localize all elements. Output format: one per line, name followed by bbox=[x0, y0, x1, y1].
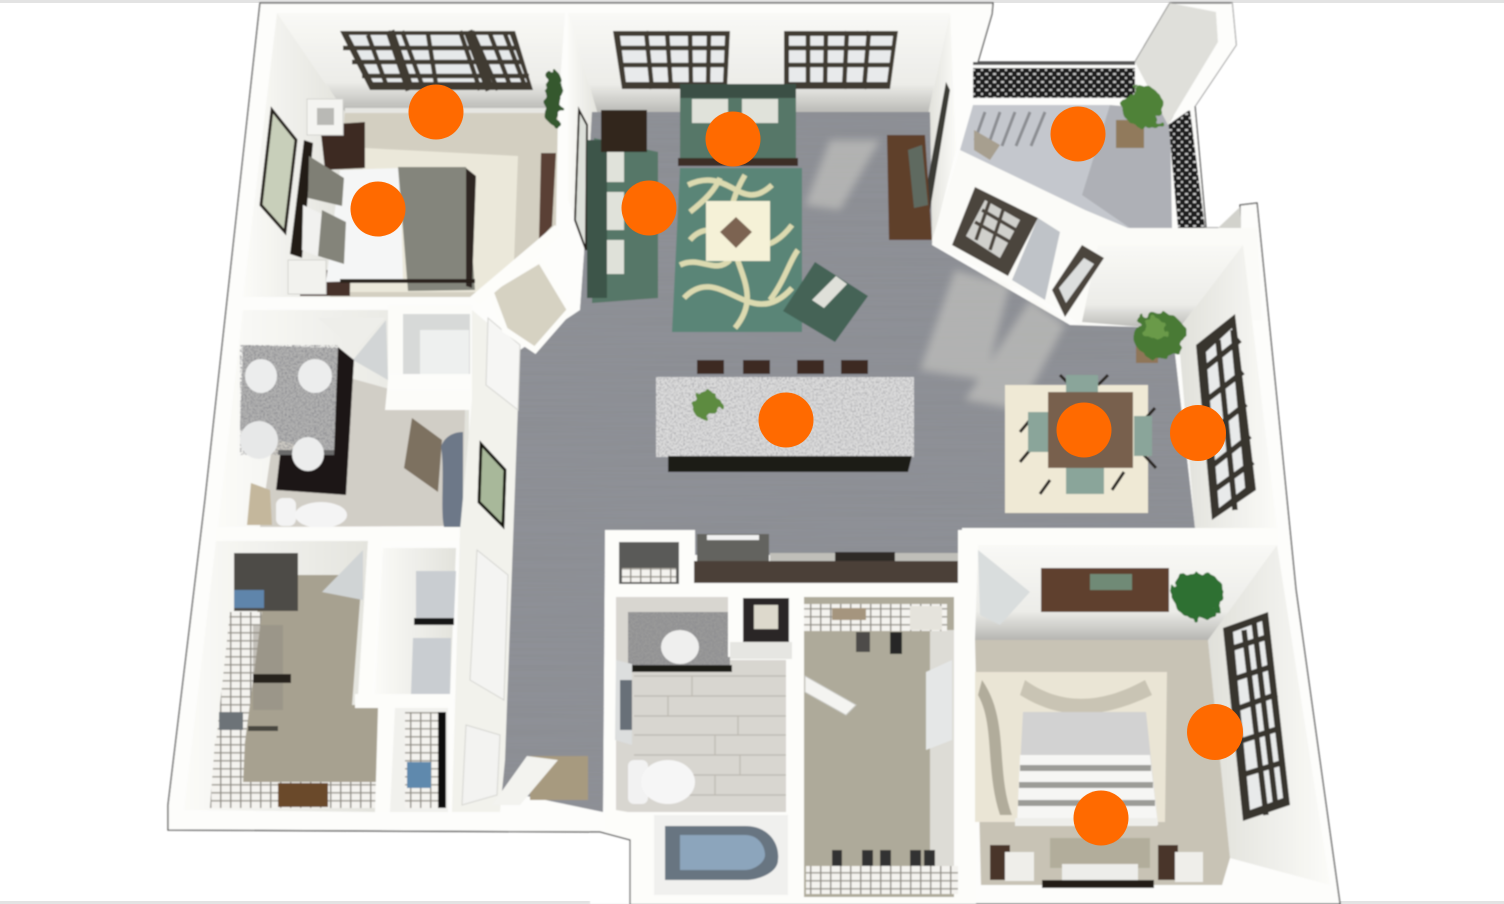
plant bbox=[1172, 571, 1224, 619]
marker: dining window bbox=[1170, 405, 1226, 461]
white cutout corner bbox=[590, 832, 630, 904]
kitchen island bbox=[656, 360, 914, 472]
stools bbox=[697, 360, 868, 374]
railing side bbox=[1168, 110, 1205, 228]
entry mat bbox=[530, 756, 588, 800]
shelving bbox=[210, 553, 377, 808]
door bbox=[353, 320, 388, 380]
nightstands bbox=[990, 845, 1203, 882]
linen shelf bbox=[728, 597, 792, 659]
sofa top bbox=[678, 84, 798, 166]
door 3 bbox=[462, 725, 500, 805]
console bbox=[1041, 568, 1169, 612]
marker: dining table bbox=[1056, 402, 1112, 458]
bed bbox=[290, 140, 476, 291]
bed bbox=[1015, 712, 1158, 888]
room: living area wood floor bbox=[490, 13, 1210, 815]
side table bbox=[601, 110, 647, 152]
side door bbox=[926, 660, 952, 750]
wall stubs bbox=[216, 527, 466, 812]
corridor art bbox=[479, 444, 505, 526]
room: lower right bedroom bbox=[975, 545, 1330, 888]
entry door bbox=[492, 756, 558, 805]
plant bbox=[545, 70, 563, 126]
dresser bbox=[539, 153, 556, 240]
toilet bbox=[628, 760, 695, 804]
plant bbox=[691, 391, 721, 419]
sofa left bbox=[587, 138, 658, 303]
toilet bbox=[276, 498, 347, 528]
chair legs bbox=[1020, 375, 1156, 494]
room: hall bath bbox=[590, 597, 792, 904]
bedroom door frame bbox=[490, 260, 570, 350]
pantry bbox=[619, 542, 679, 584]
core: kitchen counter and walls bbox=[605, 530, 978, 904]
coffee table bbox=[706, 201, 770, 261]
rug bbox=[672, 168, 802, 332]
dining side wall edge bbox=[962, 528, 1278, 545]
balcony bbox=[960, 3, 1241, 228]
small notch wall bbox=[1218, 207, 1241, 228]
outer wall shell bbox=[168, 3, 1340, 904]
closet nook walls bbox=[385, 305, 472, 410]
marker: lower bedroom window bbox=[1187, 704, 1243, 760]
double vanity bbox=[240, 345, 354, 495]
marker: kitchen island bbox=[758, 392, 814, 448]
room: master bath upper left bbox=[218, 305, 472, 528]
cutout edge bbox=[590, 832, 630, 904]
door bbox=[615, 660, 632, 745]
bathtub bbox=[441, 432, 463, 527]
bath floor tiles bbox=[634, 676, 786, 795]
diagonal wall with glass doors bbox=[932, 150, 1277, 528]
nightstands and lamps bbox=[288, 99, 365, 296]
bottom shelf bbox=[806, 866, 958, 894]
marker: sofa left bbox=[622, 180, 676, 236]
door 2 bbox=[470, 550, 508, 700]
right wall of dining area bbox=[1178, 245, 1277, 528]
back wall of dining area bbox=[1082, 245, 1243, 330]
window bbox=[1223, 612, 1290, 821]
railing back bbox=[973, 62, 1135, 98]
laundry room bbox=[375, 548, 456, 694]
counter bbox=[694, 534, 962, 583]
apartment drawing bbox=[168, 3, 1340, 904]
marker: sofa top bbox=[706, 112, 760, 166]
back windows bbox=[613, 31, 898, 89]
balcony furniture bbox=[974, 130, 1000, 160]
wall art bbox=[261, 110, 296, 232]
french doors bbox=[952, 187, 1104, 317]
dining rug bbox=[1005, 385, 1148, 513]
dining table bbox=[1048, 392, 1133, 468]
vanity bbox=[628, 612, 732, 672]
door bbox=[978, 550, 1030, 625]
rug bbox=[350, 148, 518, 292]
marker: lower bed bbox=[1074, 790, 1128, 846]
dining windows bbox=[1196, 314, 1256, 520]
wall art right bbox=[926, 82, 950, 210]
rug bbox=[975, 672, 1167, 822]
room: top left bedroom bbox=[243, 13, 565, 297]
dining set bbox=[1005, 375, 1156, 513]
hanging clothes bbox=[832, 850, 935, 866]
marker: balcony bbox=[1050, 106, 1106, 162]
sunlight patches bbox=[805, 140, 1065, 410]
marker: bedroom window bbox=[408, 84, 464, 140]
door 1 bbox=[486, 318, 520, 410]
bathtub bbox=[654, 815, 788, 895]
door bbox=[805, 676, 856, 715]
dining chairs bbox=[1028, 375, 1152, 494]
tv console bbox=[887, 135, 932, 240]
window bbox=[340, 31, 533, 90]
small closet bbox=[378, 708, 448, 812]
corridor wall with doors bbox=[452, 225, 570, 812]
towel basket bbox=[247, 483, 272, 525]
plant: dining corner bbox=[1134, 313, 1186, 363]
balcony side wall bbox=[1135, 3, 1218, 125]
door bbox=[322, 550, 363, 600]
marker: bed bbox=[350, 182, 406, 236]
balcony slats shadow bbox=[975, 112, 1045, 146]
wall art left bbox=[575, 110, 587, 250]
armchair bbox=[783, 262, 868, 342]
balcony plant bbox=[1116, 86, 1163, 148]
room: walk-in closet bbox=[804, 597, 958, 897]
shower curtain bbox=[404, 418, 442, 492]
room: lower left closet and laundry bbox=[184, 527, 466, 812]
